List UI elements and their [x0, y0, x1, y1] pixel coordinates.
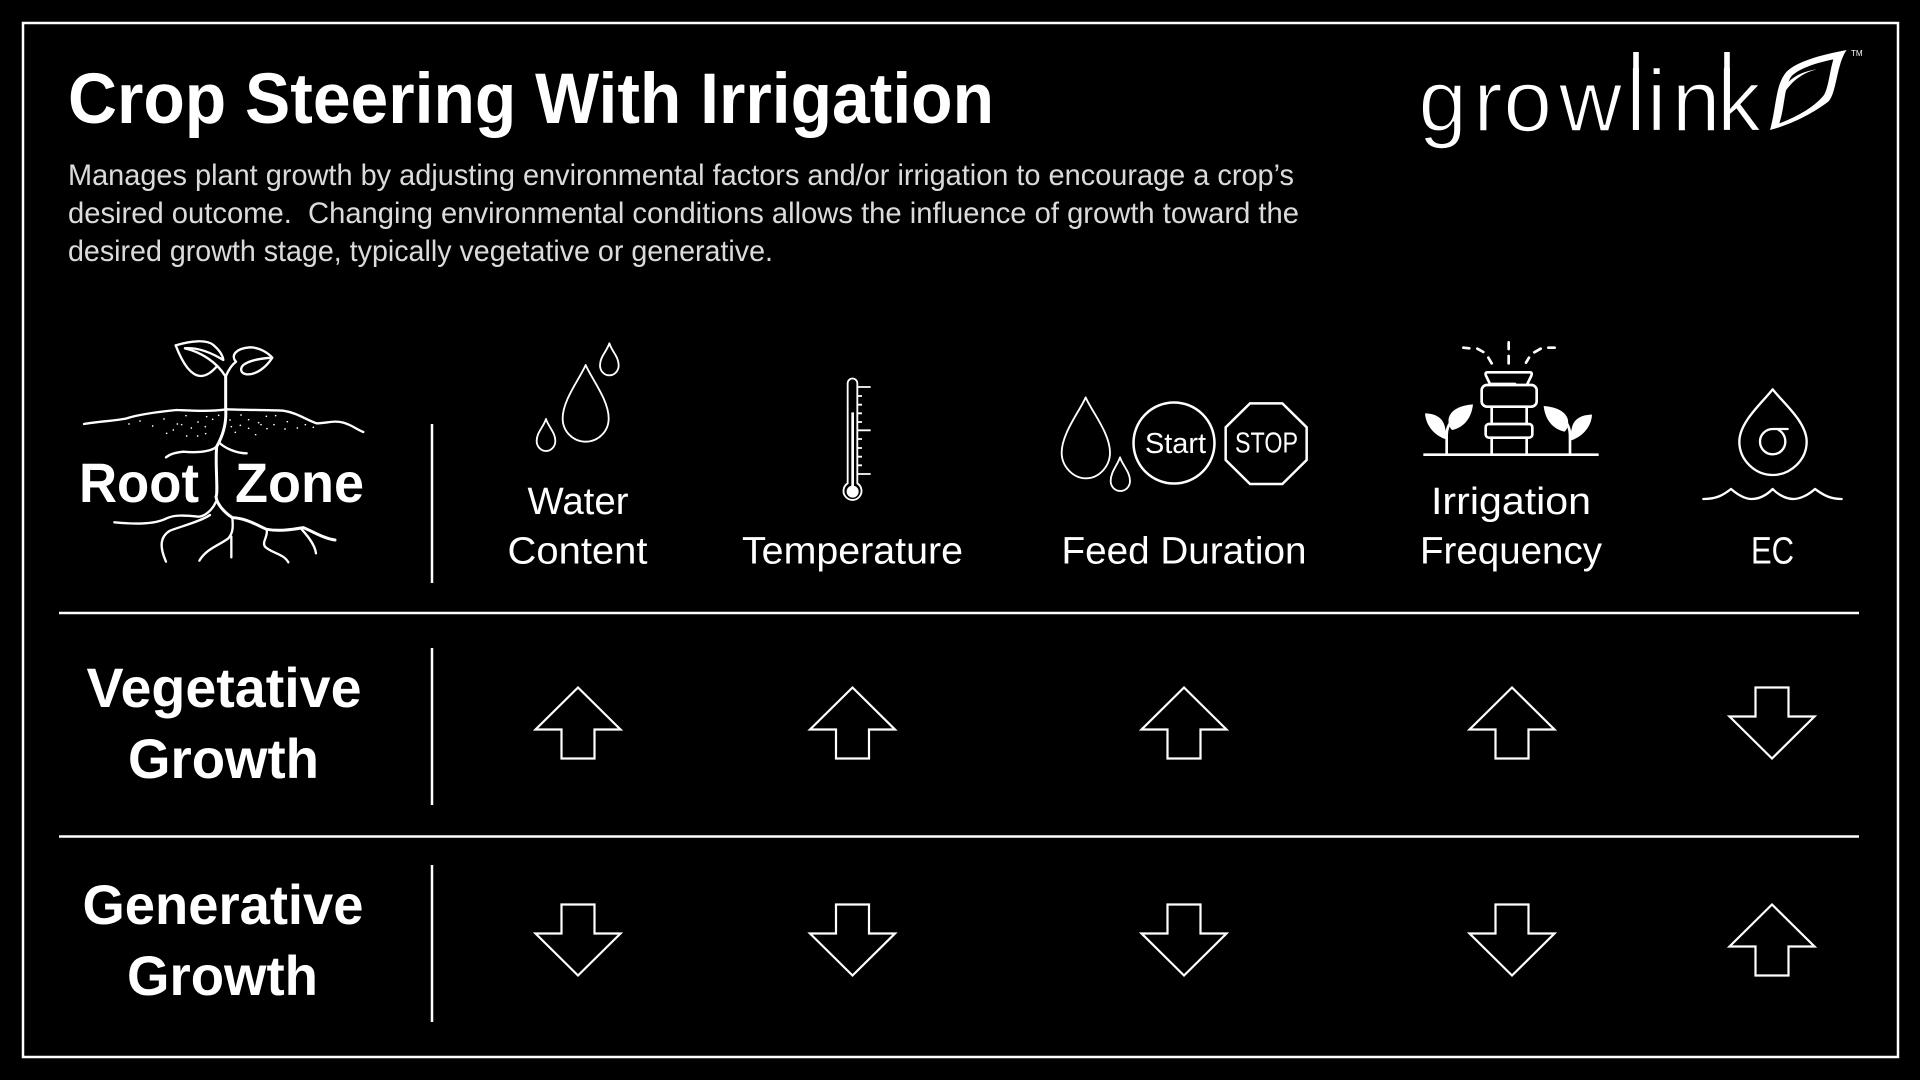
- heading: Root Zone: Zone: [235, 451, 364, 514]
- drops: [1062, 397, 1130, 491]
- arrow down: temperature: [810, 904, 895, 976]
- stop octagon: [1226, 403, 1307, 484]
- logo leaf icon: [1770, 50, 1847, 130]
- intro text block: [68, 159, 1299, 268]
- label: Water Content: Water: [528, 481, 629, 523]
- label: Temperature: Temperature: [742, 530, 963, 572]
- stop octagon: STOP: [1235, 428, 1298, 460]
- label: Water Content: [508, 481, 648, 572]
- trademark: TM: [1851, 49, 1863, 58]
- arrow up: irrigation frequency: [1470, 688, 1554, 758]
- intro text block: desired outcome. Changing environmental conditions allows the influence of growth toward the: [68, 197, 1299, 230]
- label: Irrigation Frequency: Frequency: [1420, 530, 1602, 572]
- row label: Generative: [82, 873, 364, 936]
- label: Irrigation Frequency: Irrigation: [1431, 481, 1591, 523]
- arrow up: EC: [1730, 904, 1814, 976]
- row label: Growth: [127, 944, 318, 1007]
- arrow up: feed duration: [1142, 688, 1226, 758]
- icon: water drops: [537, 343, 619, 451]
- arrow down: feed duration: [1142, 904, 1226, 976]
- intro text block: desired growth stage, typically vegetative or generative.: [68, 235, 773, 268]
- logo wordmark: growlink: [1418, 53, 1761, 150]
- start circle: Start: [1145, 428, 1206, 460]
- title: Crop Steering With Irrigation: [68, 60, 994, 139]
- row label: [86, 656, 362, 790]
- row label: Growth: [128, 727, 319, 790]
- row label: [82, 873, 364, 1007]
- logo: growlink: [1418, 49, 1863, 150]
- label: EC: EC: [1751, 530, 1794, 572]
- icon: EC drop with sigma and waves: [1703, 389, 1842, 499]
- label: Feed Duration: Feed Duration: [1062, 530, 1306, 572]
- icon: sprinkler with plants: [1423, 342, 1599, 455]
- heading: Root Zone: Root: [79, 451, 199, 514]
- arrow down: water content: [536, 904, 620, 976]
- label: Irrigation Frequency: [1420, 481, 1602, 572]
- row label: Vegetative: [86, 656, 362, 719]
- arrow up: temperature: [810, 688, 895, 758]
- intro text block: Manages plant growth by adjusting environmental factors and/or irrigation to encourage a crop’s: [68, 159, 1294, 192]
- arrow down: EC: [1730, 688, 1814, 758]
- row: Generative Growth: [82, 873, 1814, 1007]
- label: Water Content: Content: [508, 530, 648, 572]
- arrow up: water content: [536, 688, 620, 758]
- start circle: [1134, 402, 1214, 484]
- heading: Root Zone: [79, 451, 364, 514]
- row: Vegetative Growth: [86, 656, 1814, 790]
- arrow down: irrigation frequency: [1470, 904, 1554, 976]
- icon: root zone plant: [84, 341, 363, 562]
- icon: feed duration drops and start stop: [1062, 397, 1307, 491]
- icon: thermometer: [843, 378, 871, 500]
